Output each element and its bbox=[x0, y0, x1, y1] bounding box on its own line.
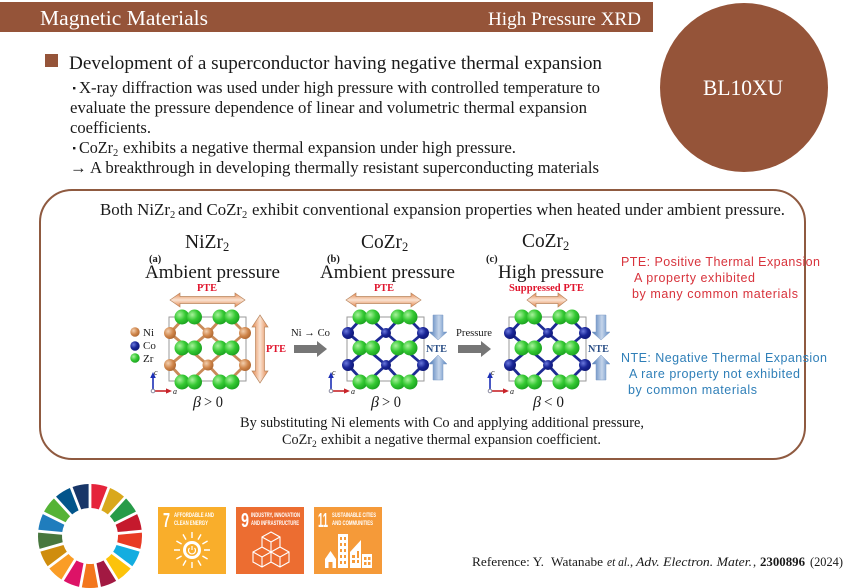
SDG wheel bbox=[35, 481, 144, 588]
SDG 9 tile bbox=[236, 507, 304, 574]
structure c: CoZr2 high pressure: CoZr bbox=[522, 231, 563, 252]
reference citation: 2300896 bbox=[760, 555, 805, 569]
structure c: CoZr2 high pressure: 2 bbox=[563, 239, 569, 253]
arrow: pressure: Pressure bbox=[456, 328, 492, 339]
structure b: CoZr2 ambient: CoZr bbox=[361, 232, 402, 253]
structure b: CoZr2 ambient: PTE bbox=[374, 283, 394, 294]
panel: expansion comparison bbox=[40, 190, 827, 459]
structure c: CoZr2 high pressure: High pressure bbox=[498, 263, 604, 283]
panel intro sentence: 2 bbox=[170, 210, 175, 221]
summary text block bbox=[70, 78, 600, 177]
structure c: CoZr2 high pressure: (c) bbox=[486, 254, 498, 265]
PTE definition: A property exhibited bbox=[634, 271, 755, 285]
structure b: CoZr2 ambient: (b) bbox=[327, 254, 340, 265]
panel conclusion: 2 bbox=[312, 440, 317, 450]
SDG 7 tile: AFFORDABLE AND bbox=[174, 512, 214, 519]
reference citation: Reference: Y. bbox=[472, 555, 544, 569]
SDG 9 tile: 9 bbox=[241, 510, 249, 532]
reference citation: , bbox=[753, 555, 756, 569]
beamline badge: BL10XU bbox=[703, 76, 783, 100]
beamline badge bbox=[660, 3, 828, 172]
PTE definition: PTE: Positive Thermal Expansion bbox=[621, 255, 820, 269]
structure a: NiZr2 ambient: β bbox=[192, 394, 201, 411]
reference citation: , bbox=[630, 555, 633, 569]
header bar bbox=[0, 2, 653, 32]
icon: city bbox=[325, 534, 372, 568]
atom legend: Ni bbox=[143, 327, 154, 339]
panel intro sentence: exhibit conventional expansion properties when heated under ambient pressure. bbox=[252, 200, 785, 219]
summary text block: coefficients. bbox=[70, 118, 151, 137]
summary text block: exhibits a negative thermal expansion under high pressure. bbox=[123, 138, 516, 157]
structure b: CoZr2 ambient: c bbox=[332, 368, 336, 377]
SDG 7 tile: CLEAN ENERGY bbox=[174, 520, 208, 527]
summary text block: evaluate the pressure dependence of linear and volumetric thermal expansion bbox=[70, 98, 587, 117]
panel intro sentence: 2 bbox=[242, 210, 247, 221]
panel intro sentence: Both NiZr bbox=[100, 200, 171, 219]
header technique label: High Pressure XRD bbox=[488, 9, 641, 30]
structure a: NiZr2 ambient: PTE bbox=[266, 344, 286, 355]
SDG 11 tile: 11 bbox=[318, 510, 328, 532]
structure a: NiZr2 ambient: (a) bbox=[149, 254, 162, 265]
arrow: Ni to Co: Ni → Co bbox=[291, 328, 330, 339]
structure c: CoZr2 high pressure: a bbox=[510, 387, 514, 396]
structure a: NiZr2 ambient: Ambient pressure bbox=[145, 263, 280, 283]
structure c: CoZr2 high pressure: β bbox=[532, 394, 541, 411]
panel conclusion: CoZr bbox=[282, 432, 312, 448]
structure b: CoZr2 ambient: NTE bbox=[426, 344, 447, 355]
panel intro sentence: and CoZr bbox=[178, 200, 243, 219]
SDG 7 tile bbox=[158, 507, 226, 574]
PTE definition bbox=[621, 255, 820, 301]
reference citation: et al. bbox=[607, 555, 630, 569]
structure b: CoZr2 ambient: a bbox=[351, 387, 355, 396]
summary text block: CoZr bbox=[79, 138, 114, 157]
SDG 11 tile: AND COMMUNITIES bbox=[332, 520, 373, 527]
SDG 9 tile: AND INFRASTRUCTURE bbox=[251, 520, 299, 527]
atom legend: Zr bbox=[143, 353, 154, 365]
NTE definition: by common materials bbox=[628, 383, 757, 397]
main heading: Development of a superconductor having negative thermal expansion bbox=[69, 53, 603, 74]
summary text block: 2 bbox=[113, 148, 118, 159]
structure a: NiZr2 ambient: PTE bbox=[197, 283, 217, 294]
structure b: CoZr2 ambient: 2 bbox=[402, 240, 408, 254]
structure a: NiZr2 ambient: 2 bbox=[223, 240, 229, 254]
structure c: CoZr2 high pressure: < 0 bbox=[544, 394, 564, 411]
panel intro sentence bbox=[100, 200, 785, 221]
structure c: CoZr2 high pressure: NTE bbox=[588, 344, 609, 355]
NTE definition bbox=[621, 351, 827, 397]
arrow: Ni to Co bbox=[291, 328, 330, 357]
reference citation: (2024) bbox=[810, 555, 843, 569]
icon: sun bbox=[174, 532, 210, 568]
SDG 9 tile: INDUSTRY, INNOVATION bbox=[251, 512, 300, 519]
atom legend bbox=[130, 327, 156, 365]
panel conclusion: By substituting Ni elements with Co and applying additional pressure, bbox=[240, 415, 644, 431]
structure b: CoZr2 ambient bbox=[320, 232, 455, 411]
NTE definition: A rare property not exhibited bbox=[629, 367, 800, 381]
summary text block: X-ray diffraction was used under high pressure with controlled temperature to bbox=[79, 78, 600, 97]
SDG 11 tile bbox=[314, 507, 382, 574]
SDG 11 tile: SUSTAINABLE CITIES bbox=[332, 512, 376, 519]
structure a: NiZr2 ambient bbox=[145, 232, 286, 411]
structure a: NiZr2 ambient: > 0 bbox=[204, 394, 223, 411]
reference citation bbox=[472, 555, 843, 569]
reference citation: Adv. Electron. Mater. bbox=[635, 555, 752, 569]
structure b: CoZr2 ambient: β bbox=[370, 394, 379, 411]
PTE definition: by many common materials bbox=[632, 287, 798, 301]
panel conclusion: exhibit a negative thermal expansion coefficient. bbox=[321, 432, 601, 448]
structure c: CoZr2 high pressure: c bbox=[491, 368, 495, 377]
atom legend: Co bbox=[143, 340, 156, 352]
NTE definition: NTE: Negative Thermal Expansion bbox=[621, 351, 827, 365]
structure a: NiZr2 ambient: NiZr bbox=[185, 232, 224, 253]
structure c: CoZr2 high pressure: Suppressed PTE bbox=[509, 283, 584, 294]
reference citation: Watanabe bbox=[551, 555, 603, 569]
SDG 7 tile: 7 bbox=[163, 510, 170, 532]
summary text block: → A breakthrough in developing thermally resistant superconducting materials bbox=[70, 158, 599, 177]
bullet square bbox=[45, 54, 58, 67]
icon: cubes bbox=[253, 532, 289, 567]
structure a: NiZr2 ambient: c bbox=[154, 368, 158, 377]
structure b: CoZr2 ambient: > 0 bbox=[382, 394, 401, 411]
header title: Magnetic Materials bbox=[40, 6, 208, 30]
structure b: CoZr2 ambient: Ambient pressure bbox=[320, 263, 455, 283]
arrow: pressure bbox=[456, 328, 492, 357]
panel conclusion bbox=[240, 415, 644, 450]
structure a: NiZr2 ambient: a bbox=[173, 387, 177, 396]
structure c: CoZr2 high pressure bbox=[486, 231, 610, 411]
